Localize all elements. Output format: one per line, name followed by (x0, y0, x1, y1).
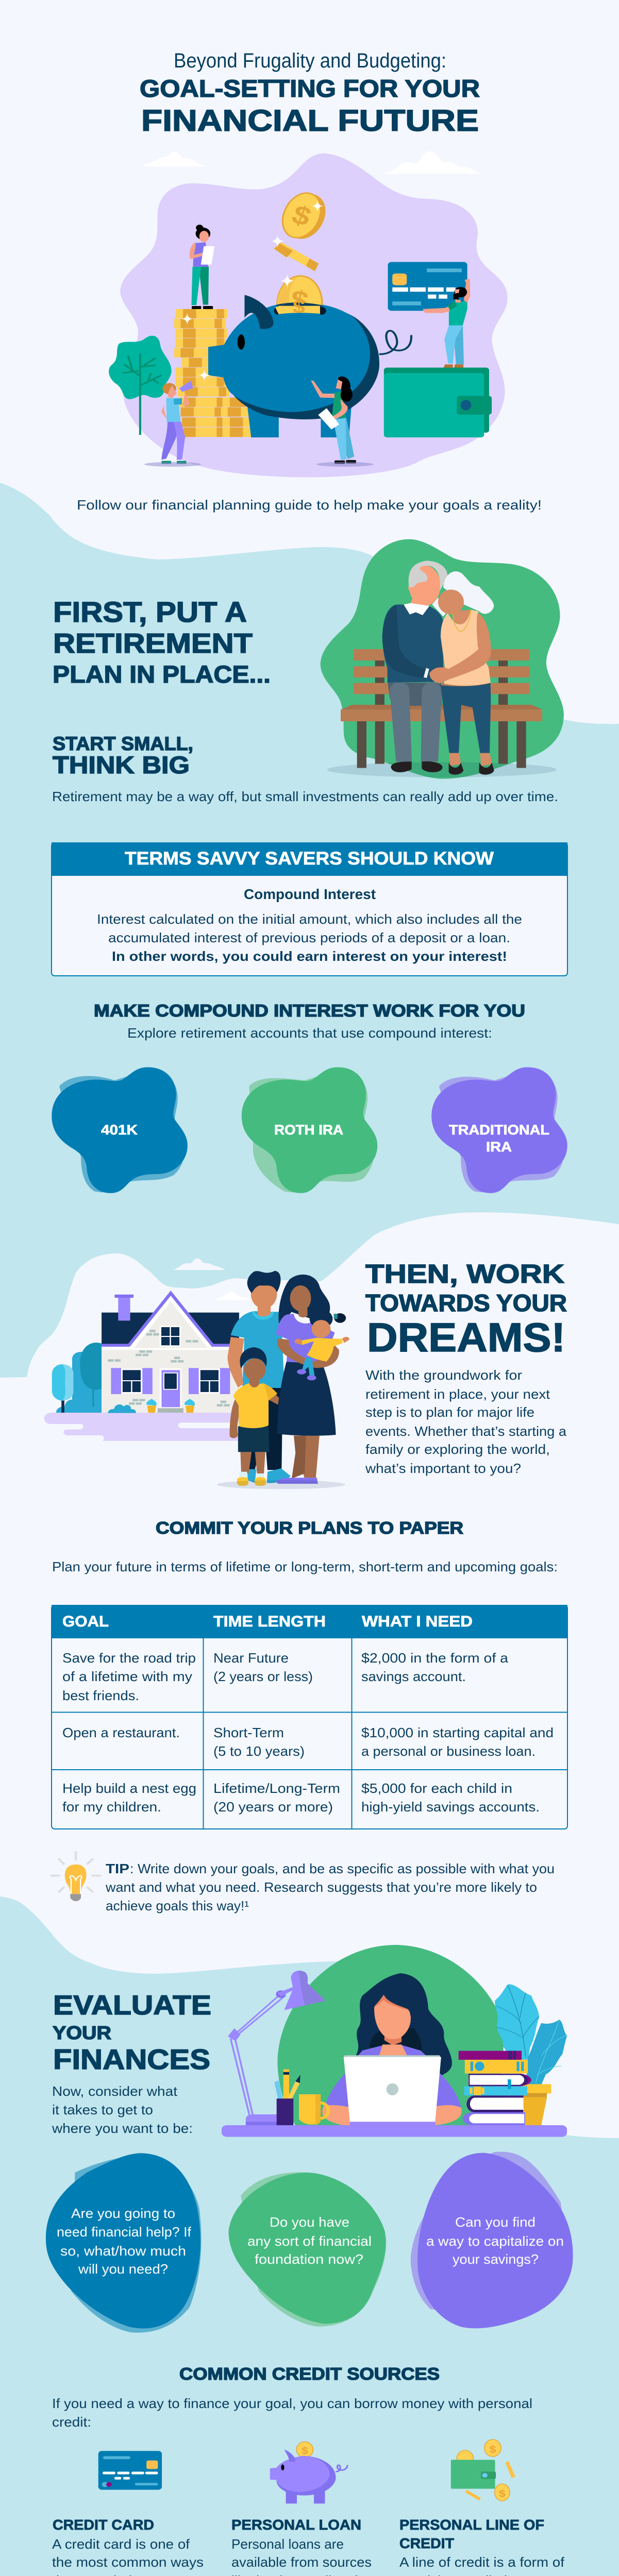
top coin falling (276, 189, 332, 243)
table row 2: $10,000 in starting capital and (361, 1725, 554, 1740)
table row 1: Near Future (213, 1650, 289, 1666)
question: capitalize (426, 2214, 564, 2267)
icon: wallet with coins (451, 2439, 515, 2501)
mother (276, 1275, 339, 1484)
table row 3: (20 years or more) (213, 1799, 333, 1815)
question: financial help: so, what/how much (60, 2243, 186, 2259)
tip text: want and what you need. Research suggests that you’re more likely to (105, 1879, 537, 1895)
book stack (459, 2051, 531, 2125)
compound interest definition: Interest calculated on the initial amount, which also includes all the (97, 911, 522, 927)
credit card column: the most common ways (52, 2554, 204, 2570)
trees (52, 1343, 102, 1413)
credit sources intro: If you need a way to finance your goal, you can borrow money with personal (52, 2396, 532, 2411)
compound interest definition: Compound Interest (244, 886, 376, 902)
compound interest definition: In other words, you could earn interest on your interest! (112, 948, 507, 964)
question: financial help: Are you going to (71, 2206, 175, 2221)
account labels: TRADITIONAL (449, 1122, 549, 1138)
dreams text: family or exploring the world, (365, 1442, 550, 1457)
evaluate text: it takes to get to (52, 2102, 153, 2117)
illustration: family and house (44, 1259, 349, 1489)
table header labels: GOAL (62, 1613, 109, 1630)
table row 3: Lifetime/Long-Term (213, 1781, 340, 1796)
credit sources heading: COMMON CREDIT SOURCES (179, 2364, 440, 2383)
family shadow (217, 1480, 345, 1489)
line of credit column: A line of credit is a form of (399, 2554, 565, 2570)
terms panel (52, 842, 567, 976)
tip text: : Write down your goals, and be as specific as possible with what you (130, 1861, 555, 1876)
top coin falling: $ (288, 199, 315, 231)
intro line: Follow our financial planning guide to help make your goals a reality! (77, 497, 542, 513)
teal background band: retirement (0, 483, 619, 1378)
icon: credit card (98, 2451, 162, 2490)
table row 2: Open a restaurant. (62, 1725, 180, 1740)
credit card column: A credit card is one of (52, 2536, 190, 2552)
desk (222, 2122, 567, 2137)
blob: capitalize (411, 2151, 573, 2328)
father (227, 1271, 291, 1483)
dreams text: retirement in place, your next (365, 1386, 550, 1402)
tip text: achieve goals this way!¹ (106, 1898, 249, 1913)
woman hair (356, 1973, 452, 2076)
panel body (52, 843, 567, 976)
credit card (388, 262, 467, 311)
evaluate heading: FINANCES (53, 2043, 210, 2075)
retirement text: Retirement may be a way off, but small investments can really add up over time. (52, 789, 558, 804)
retirement heading: FIRST, PUT A (53, 596, 247, 628)
icon: purple piggy bank (270, 2442, 347, 2503)
pig legs (247, 404, 352, 437)
evaluate text (52, 2083, 193, 2136)
compound subtext: Explore retirement accounts that use compound interest: (127, 1025, 492, 1041)
question: financial help (57, 2206, 192, 2277)
illustration: piggy bank with coins, card and wallet (109, 151, 508, 477)
piggy body (208, 302, 379, 419)
retirement heading: PLAN IN PLACE... (53, 660, 271, 688)
account labels (101, 1122, 549, 1155)
personal loan column: PERSONAL LOAN (231, 2517, 361, 2533)
dreams text (365, 1367, 567, 1476)
dreams heading: THEN, WORK (365, 1259, 564, 1289)
commit heading: COMMIT YOUR PLANS TO PAPER (156, 1518, 463, 1537)
question: foundation: foundation now? (255, 2251, 363, 2267)
icon: wallet with coins: $ (490, 2444, 496, 2455)
pig details: $ (293, 297, 305, 317)
table row 1: best friends. (62, 1688, 139, 1703)
retirement heading (53, 596, 271, 688)
baby girl (295, 1310, 349, 1380)
credit card column (52, 2517, 204, 2576)
ground (44, 1413, 239, 1441)
start small heading (53, 733, 193, 778)
coin entering slot: $ (287, 284, 311, 316)
ground shadows (144, 462, 373, 467)
green blob (321, 539, 564, 779)
person: man with megaphone (161, 381, 193, 464)
blob: financial help (46, 2153, 201, 2333)
illustration: retired couple on bench (321, 539, 564, 779)
house (102, 1291, 239, 1413)
lightbulb tip icon (51, 1851, 101, 1901)
lavender blob (119, 154, 508, 477)
table row 1: (2 years or less) (213, 1669, 313, 1684)
woman top (358, 2045, 426, 2056)
wallet (384, 368, 492, 437)
coin edge-on (274, 242, 319, 271)
comparison table (52, 1605, 567, 1829)
accounts blobs (52, 1067, 567, 1193)
plant pot (521, 2084, 551, 2125)
question: foundation (247, 2214, 372, 2267)
title: GOAL-SETTING FOR YOUR (140, 75, 480, 102)
blob: 401k (52, 1067, 188, 1193)
green arch (277, 1945, 504, 2125)
pig details (238, 295, 411, 354)
woman face (375, 1995, 411, 2018)
title (140, 49, 480, 138)
dreams heading (365, 1259, 567, 1360)
table row 2: Short-Term (213, 1725, 284, 1740)
cloud left (142, 152, 206, 166)
blob: traditional ira (431, 1067, 567, 1193)
cloud right (383, 151, 481, 174)
compound interest definition: accumulated interest of previous periods of a deposit or a loan. (108, 930, 510, 945)
question: capitalize: your savings? (453, 2251, 539, 2267)
dreams text: events. Whether that’s starting a (365, 1423, 567, 1439)
question: financial help: need financial help? If (57, 2224, 192, 2240)
credit card column: CREDIT CARD (53, 2517, 154, 2533)
title: FINANCIAL FUTURE (141, 104, 479, 138)
account labels: IRA (486, 1139, 512, 1155)
boy (230, 1347, 279, 1486)
panel heading: TERMS SAVVY SAVERS SHOULD KNOW (125, 849, 494, 869)
personal loan column: Personal loans are (231, 2536, 344, 2552)
panel header (52, 842, 567, 876)
personal loan column (231, 2517, 384, 2576)
question: financial help: will you need? (78, 2261, 168, 2277)
table row 3 (62, 1781, 540, 1815)
teal background band: evaluate finances (0, 1896, 619, 2576)
evaluate heading: YOUR (53, 2022, 111, 2043)
sparkles (181, 199, 324, 382)
icon: wallet with coins: $ (499, 2488, 506, 2499)
table row 3: high-yield savings accounts. (361, 1799, 540, 1815)
clouds (89, 1259, 225, 1278)
question blobs (46, 2151, 573, 2503)
evaluate heading (53, 1990, 211, 2075)
table row 3: $5,000 for each child in (361, 1781, 512, 1796)
table row 2: (5 to 10 years) (213, 1743, 305, 1759)
question: capitalize: a way to capitalize on (426, 2233, 564, 2249)
icon: purple piggy bank: $ (302, 2446, 308, 2456)
table row 1: savings account. (361, 1669, 466, 1684)
line of credit column (399, 2517, 565, 2576)
coin stack (174, 309, 251, 437)
personal loan column: available from sources (231, 2554, 372, 2570)
evaluate heading: EVALUATE (53, 1990, 211, 2021)
ground shadow (327, 762, 557, 777)
blob: foundation (229, 2172, 386, 2327)
person: man holding card (423, 279, 470, 368)
table row 1: Save for the road trip (62, 1650, 196, 1666)
table row 1: $2,000 in the form of a (361, 1650, 509, 1666)
pens and mug (274, 2070, 328, 2125)
table header labels: TIME LENGTH (213, 1613, 326, 1630)
blob: roth ira (242, 1067, 377, 1193)
woman neck (384, 2033, 401, 2045)
table header labels: WHAT I NEED (362, 1613, 473, 1630)
compound interest definition (97, 886, 522, 964)
table row 2 (62, 1725, 554, 1759)
line of credit column: PERSONAL LINE OF (399, 2517, 544, 2533)
illustration: woman at laptop (222, 1945, 567, 2137)
table row 2: a personal or business loan. (361, 1743, 536, 1759)
table row 3: for my children. (62, 1799, 161, 1815)
man (382, 561, 447, 772)
dreams heading: DREAMS! (367, 1314, 565, 1360)
table row 1: of a lifetime with my (62, 1669, 192, 1684)
dreams text: what’s important to you? (365, 1461, 521, 1476)
lamp (228, 1971, 326, 2125)
title: Beyond Frugality and Budgeting: (174, 49, 446, 72)
table row 1 (62, 1650, 509, 1703)
dreams text: With the groundwork for (365, 1367, 522, 1383)
tip text: TIP (106, 1861, 129, 1876)
plant (495, 1985, 567, 2085)
account labels: ROTH IRA (274, 1122, 343, 1138)
start small heading: START SMALL, (53, 733, 193, 754)
credit sources intro: credit: (52, 2414, 91, 2430)
account labels: 401K (101, 1122, 138, 1138)
line of credit column: CREDIT (399, 2535, 454, 2551)
arms (322, 2073, 462, 2125)
evaluate text: Now, consider what (52, 2083, 178, 2099)
person: woman pointing at pig (311, 377, 356, 464)
dreams text: step is to plan for major life (365, 1404, 534, 1420)
bench (341, 649, 542, 768)
table header labels (62, 1613, 473, 1630)
woman (424, 571, 494, 775)
evaluate text: where you want to be: (52, 2121, 193, 2136)
dreams heading: TOWARDS YOUR (365, 1290, 567, 1316)
credit sources intro (52, 2396, 532, 2430)
question: capitalize: Can you find (455, 2214, 536, 2230)
compound heading: MAKE COMPOUND INTEREST WORK FOR YOU (94, 1001, 525, 1020)
question: foundation: any sort of financial (247, 2233, 372, 2249)
commit text: Plan your future in terms of lifetime or long-term, short-term and upcoming goals: (52, 1559, 558, 1574)
person: woman standing on coins (190, 225, 214, 309)
table row 3: Help build a nest egg (62, 1781, 196, 1796)
question: foundation: Do you have (270, 2214, 349, 2230)
laptop (343, 2055, 441, 2122)
coin entering slot (277, 276, 322, 316)
tip text (105, 1861, 555, 1913)
retirement heading: RETIREMENT (53, 628, 253, 659)
start small heading: THINK BIG (53, 751, 190, 778)
tree (109, 336, 172, 435)
